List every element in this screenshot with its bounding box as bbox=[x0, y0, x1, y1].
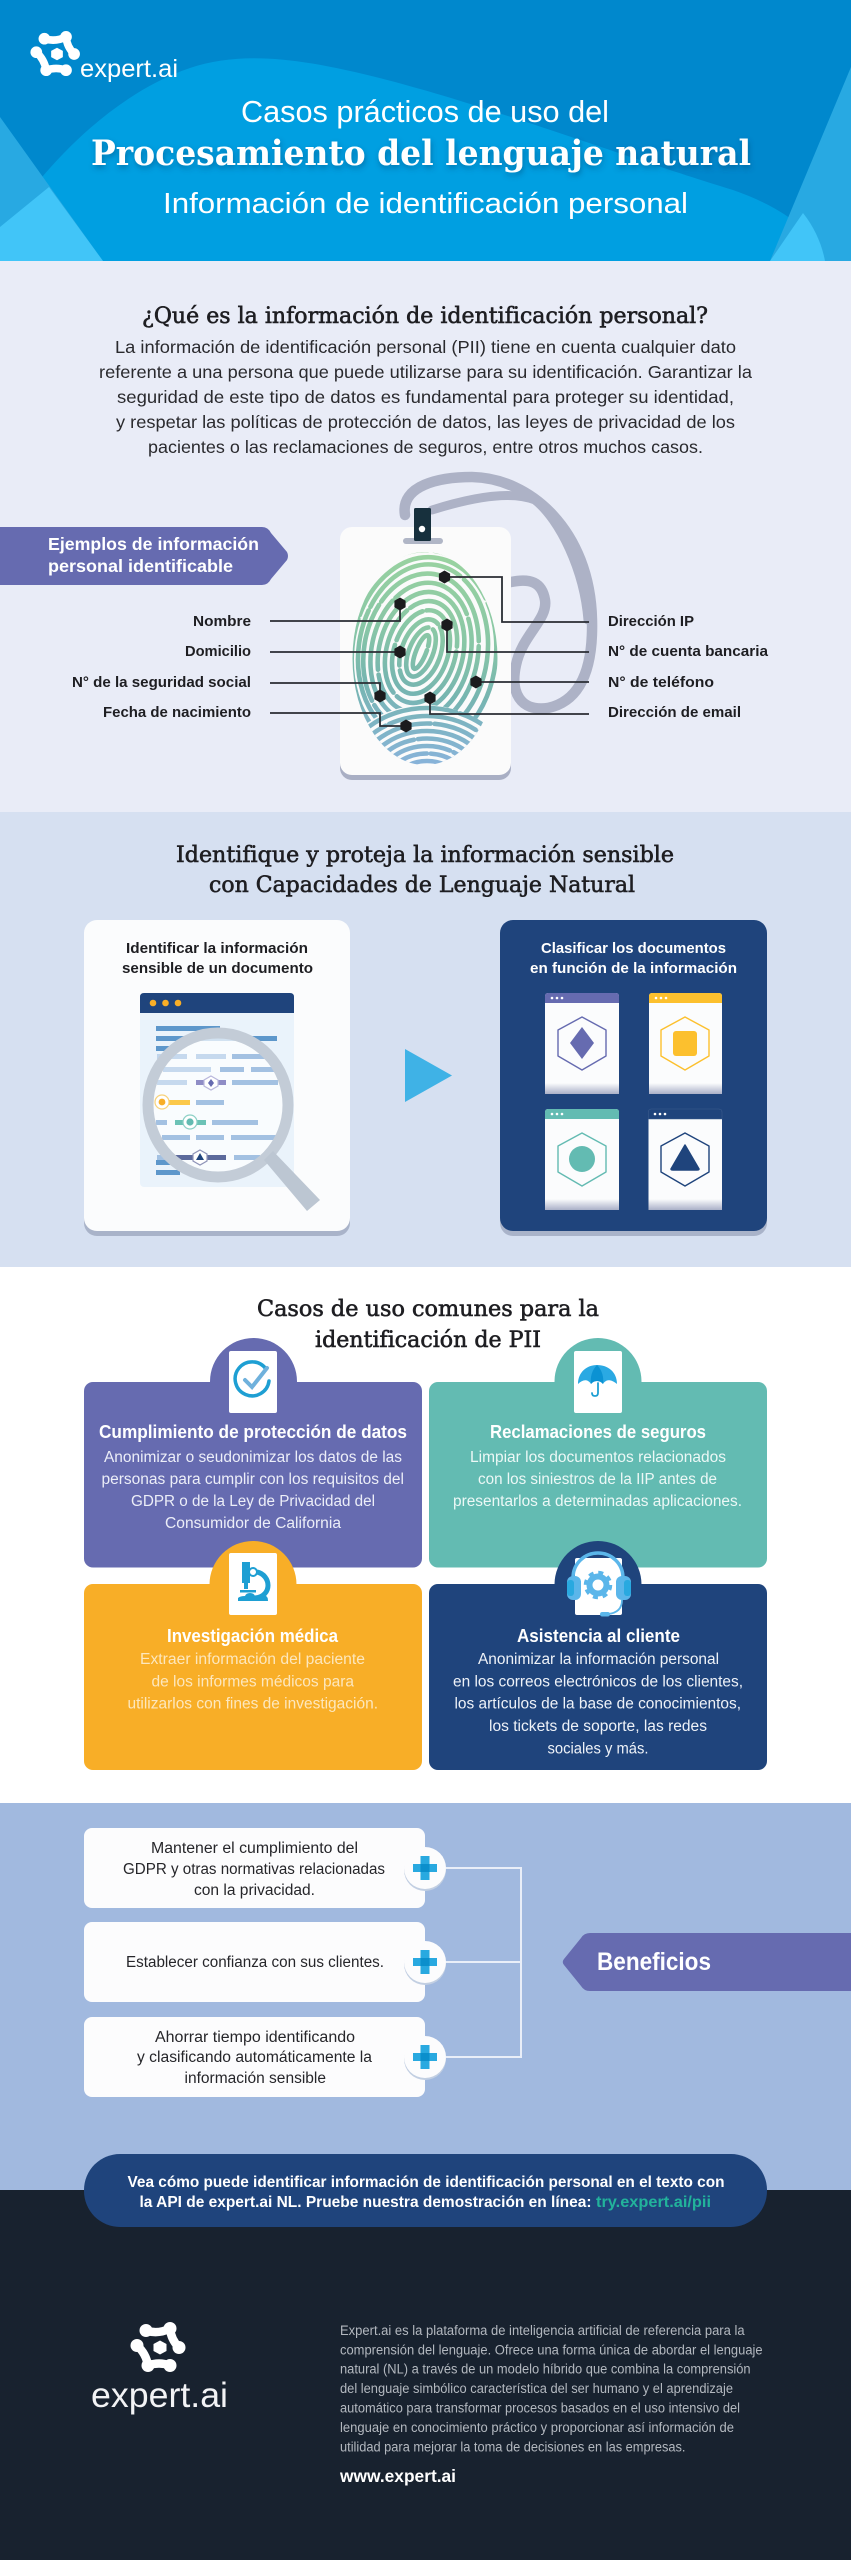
left labels: Nombre bbox=[193, 614, 251, 630]
ribbon: examples: Ejemplos de información bbox=[48, 534, 259, 554]
heading: ¿Qué es la información de identificación personal? bbox=[142, 304, 708, 329]
panel: footer bbox=[0, 2190, 851, 2560]
card: data protection: Cumplimiento de protección de datos bbox=[99, 1422, 407, 1442]
left labels bbox=[72, 614, 251, 721]
paragraph: y respetar las políticas de protección de datos, las leyes de privacidad de los bbox=[116, 412, 735, 432]
logo bbox=[30, 31, 178, 83]
doc: purple diamond bbox=[545, 993, 619, 1094]
title line 3: Información de identificación personal bbox=[163, 188, 688, 220]
icon: lanyard bbox=[405, 477, 592, 709]
card: medical research: Extraer información del paciente bbox=[140, 1651, 365, 1668]
benefit box 3: Ahorrar tiempo identificando bbox=[155, 2029, 355, 2046]
company description: automático para transformar procesos basados en el uso intensivo del bbox=[340, 2401, 740, 2416]
icon: plus bbox=[404, 1847, 446, 1891]
company description bbox=[340, 2323, 763, 2455]
left labels: Fecha de nacimiento bbox=[103, 705, 251, 721]
card: data protection: personas para cumplir con los requisitos del bbox=[102, 1471, 404, 1488]
panel: identify and protect bbox=[0, 812, 851, 1267]
callout: API demo bbox=[84, 2154, 767, 2227]
card: customer support: en los correos electrónicos de los clientes, bbox=[453, 1674, 743, 1690]
icon: ID badge bbox=[340, 508, 511, 780]
icon: document with magnifier bbox=[140, 993, 320, 1211]
heading: identificación de PII bbox=[315, 1328, 541, 1353]
card: insurance claims: Reclamaciones de seguros bbox=[490, 1422, 706, 1442]
callout: API demo: la API de expert.ai NL. Pruebe nuestra demostración en línea: bbox=[140, 2194, 592, 2211]
benefit box 3: y clasificando automáticamente la bbox=[137, 2049, 372, 2066]
icon: fingerprint bbox=[352, 552, 498, 764]
website: www.expert.ai bbox=[339, 2466, 456, 2486]
benefit box 2 bbox=[84, 1922, 446, 2002]
card: customer support: los tickets de soporte, las redes bbox=[489, 1718, 707, 1735]
card: insurance claims: presentarlos a determinadas aplicaciones. bbox=[453, 1493, 742, 1510]
benefit box 3: información sensible bbox=[184, 2070, 326, 2087]
card: identify: sensible de un documento bbox=[122, 960, 313, 977]
icon: headset and gear bbox=[567, 1553, 631, 1616]
card: customer support: sociales y más. bbox=[548, 1740, 648, 1758]
arrow bbox=[405, 1049, 452, 1102]
paragraph: seguridad de este tipo de datos es fundamental para proteger su identidad, bbox=[117, 387, 734, 407]
right labels: Dirección IP bbox=[608, 614, 694, 630]
company description: Expert.ai es la plataforma de inteligencia artificial de referencia para la bbox=[340, 2323, 745, 2338]
card: classify: Clasificar los documentos bbox=[541, 940, 726, 957]
benefit box 1: con la privacidad. bbox=[194, 1882, 315, 1899]
card: classify: en función de la información bbox=[530, 960, 737, 977]
company description: utilidad para mejorar la toma de decisiones en las empresas. bbox=[340, 2440, 686, 2455]
heading: Identifique y proteja la información sensible bbox=[176, 843, 674, 868]
connector lines bbox=[446, 1868, 521, 2057]
card: data protection: Consumidor de California bbox=[165, 1515, 341, 1532]
icon: plus bbox=[404, 2036, 446, 2080]
paragraph: pacientes o las reclamaciones de seguros, entre otros muchos casos. bbox=[148, 437, 703, 457]
ribbon: examples bbox=[0, 527, 288, 585]
icon: microscope bbox=[238, 1562, 268, 1601]
card: insurance claims bbox=[429, 1338, 767, 1568]
company description: natural (NL) a través de un modelo híbrido que combina la comprensión bbox=[340, 2362, 751, 2377]
company description: comprensión del lenguaje. Ofrece una forma única de abordar el lenguaje bbox=[340, 2342, 763, 2358]
icon: umbrella bbox=[578, 1365, 617, 1396]
icon: plus bbox=[404, 1941, 446, 1985]
card: customer support bbox=[429, 1541, 767, 1770]
paragraph: La información de identificación personal (PII) tiene en cuenta cualquier dato bbox=[115, 337, 736, 357]
card: identify: Identificar la información bbox=[126, 940, 308, 957]
benefit box 1: Mantener el cumplimiento del bbox=[151, 1840, 358, 1857]
icon: check bbox=[235, 1362, 269, 1396]
right labels: Dirección de email bbox=[608, 705, 741, 721]
company description: lenguaje en conocimiento práctico y proporcionar así información de bbox=[340, 2420, 734, 2435]
header background shapes bbox=[0, 58, 851, 261]
card: customer support: Anonimizar la información personal bbox=[478, 1651, 719, 1668]
card: data protection bbox=[84, 1338, 422, 1568]
card: insurance claims: Limpiar los documentos relacionados bbox=[470, 1449, 726, 1466]
benefit box 1 bbox=[84, 1828, 446, 1908]
title line 2: Procesamiento del lenguaje natural bbox=[91, 133, 751, 174]
heading: con Capacidades de Lenguaje Natural bbox=[209, 873, 635, 898]
card: data protection: GDPR o de la Ley de Privacidad del bbox=[131, 1493, 375, 1510]
markers bbox=[374, 570, 482, 732]
doc: navy triangle bbox=[648, 1109, 722, 1210]
heading bbox=[176, 843, 674, 898]
heading: Casos de uso comunes para la bbox=[257, 1297, 599, 1322]
panel: what is PII bbox=[0, 261, 851, 812]
ribbon: benefits: Beneficios bbox=[597, 1948, 711, 1976]
right labels: N° de cuenta bancaria bbox=[608, 644, 769, 660]
heading bbox=[257, 1297, 599, 1353]
card: medical research: de los informes médicos para bbox=[152, 1674, 354, 1690]
logo bbox=[91, 2322, 228, 2415]
card: data protection: Anonimizar o seudonimizar los datos de las bbox=[104, 1449, 402, 1466]
card: classify bbox=[500, 920, 767, 1236]
company description: del lenguaje simbólico característica del ser humano y el aprendizaje bbox=[340, 2381, 733, 2396]
benefit box 2: Establecer confianza con sus clientes. bbox=[126, 1954, 384, 1971]
card: medical research bbox=[84, 1541, 422, 1770]
ribbon: examples: personal identificable bbox=[48, 556, 233, 576]
card: medical research: utilizarlos con fines de investigación. bbox=[128, 1696, 378, 1712]
callout: API demo: try.expert.ai/pii bbox=[596, 2194, 711, 2211]
card: identify bbox=[84, 920, 350, 1236]
title line 1: Casos prácticos de uso del bbox=[241, 94, 609, 129]
logo: expert.ai bbox=[91, 2376, 228, 2415]
paragraph bbox=[99, 337, 752, 457]
panel: benefits bbox=[0, 1803, 851, 2190]
card: customer support: Asistencia al cliente bbox=[517, 1626, 680, 1646]
leader lines bbox=[270, 577, 589, 726]
right labels: N° de teléfono bbox=[608, 675, 714, 691]
panel: header bbox=[0, 0, 851, 261]
logo: expert.ai bbox=[80, 55, 178, 83]
benefit box 3 bbox=[84, 2017, 446, 2097]
card: customer support: los artículos de la base de conocimientos, bbox=[454, 1696, 741, 1712]
paragraph: referente a una persona que puede utilizarse para su identificación. Garantizar la bbox=[99, 362, 752, 382]
panel: common use cases bbox=[0, 1267, 851, 1803]
left labels: Domicilio bbox=[185, 644, 251, 660]
card: insurance claims: con los siniestros de la IIP antes de bbox=[478, 1471, 717, 1488]
card: medical research: Investigación médica bbox=[167, 1626, 339, 1646]
left labels: N° de la seguridad social bbox=[72, 675, 251, 691]
callout: API demo: Vea cómo puede identificar información de identificación personal en el texto con bbox=[128, 2174, 724, 2191]
right labels bbox=[608, 614, 769, 721]
doc: teal circle bbox=[545, 1109, 619, 1210]
doc: yellow square bbox=[649, 993, 722, 1094]
benefit box 1: GDPR y otras normativas relacionadas bbox=[123, 1861, 385, 1878]
ribbon: benefits bbox=[563, 1933, 851, 1991]
